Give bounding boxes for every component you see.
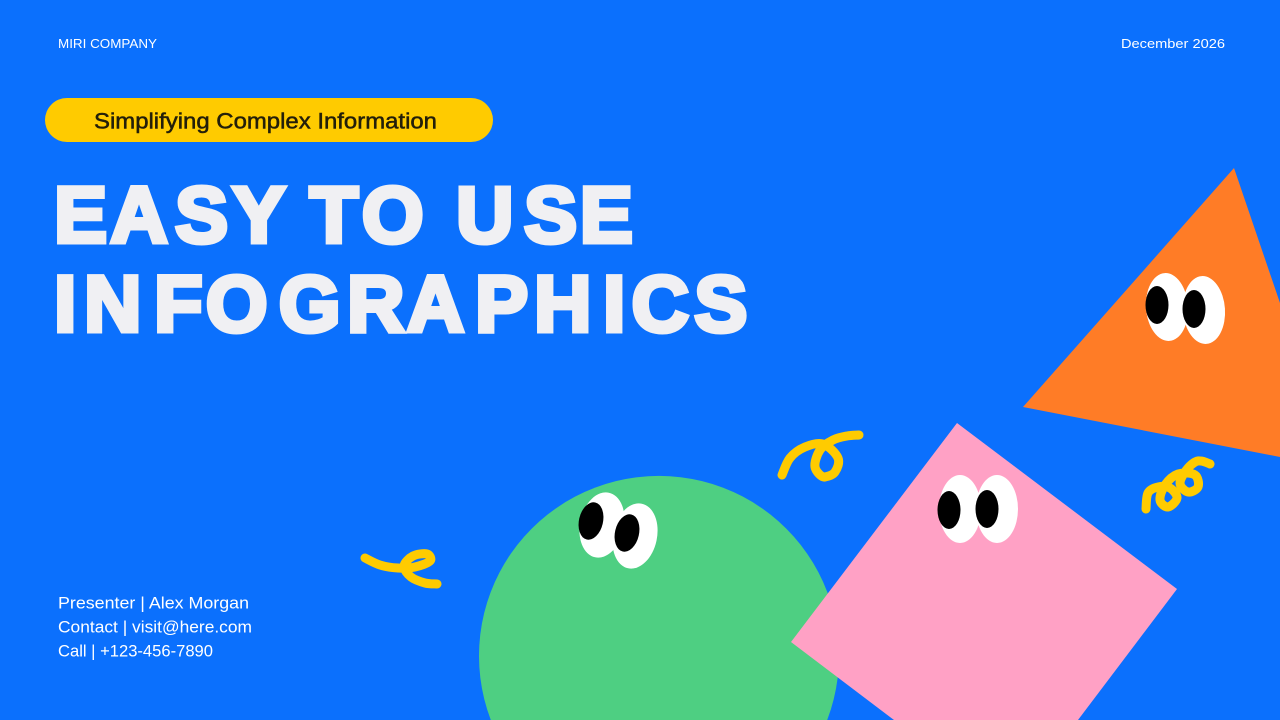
company name: MIRI COMPANY: [58, 36, 157, 51]
title: INFOGRAPHICS: [54, 259, 747, 348]
title: [54, 170, 747, 348]
contact details: [58, 594, 252, 660]
pink square character: [791, 423, 1177, 720]
subtitle pill: [45, 98, 493, 142]
squiggle: right: [1146, 461, 1210, 509]
subtitle pill: Simplifying Complex Information: [94, 108, 437, 134]
title: EASY TO USE: [54, 170, 633, 259]
orange triangle character: [1023, 168, 1280, 457]
contact details: Contact | visit@here.com: [58, 618, 252, 636]
squiggle: top centre: [782, 435, 859, 477]
squiggle: left: [365, 554, 437, 584]
contact details: Call | +123-456-7890: [58, 642, 213, 660]
green circle character: [479, 476, 839, 720]
contact details: Presenter | Alex Morgan: [58, 594, 249, 612]
date: December 2026: [1121, 36, 1225, 51]
